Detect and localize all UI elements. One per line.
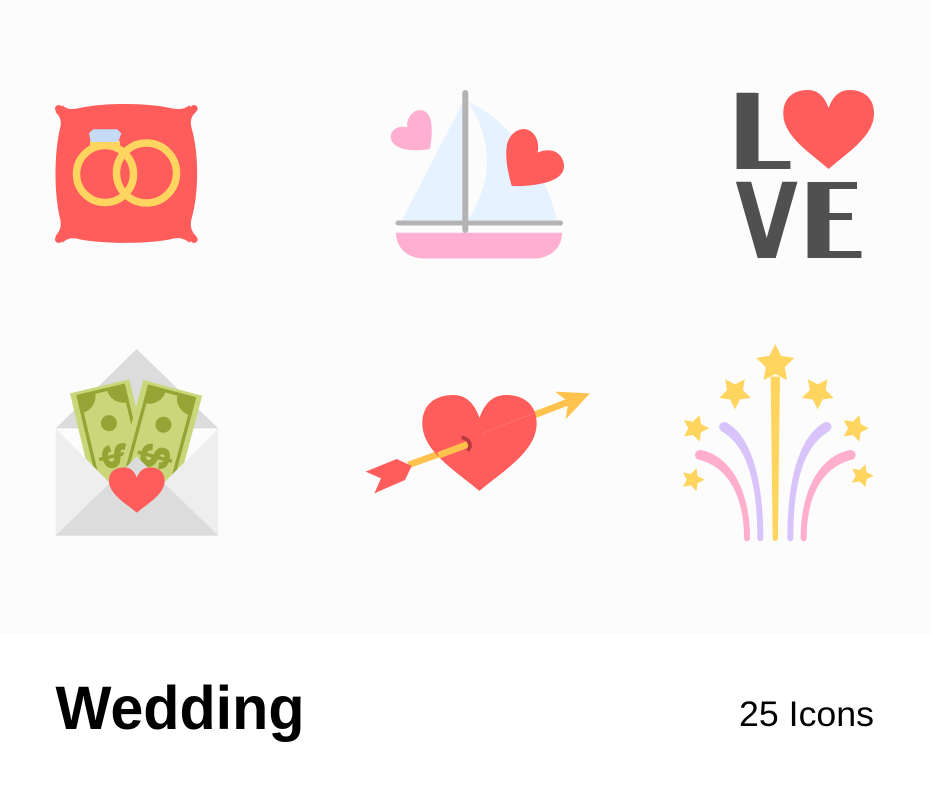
icon: LOVE lettering with heart — [727, 72, 874, 283]
icon: LOVE lettering with heart: E — [798, 161, 869, 283]
icon: sailboat with hearts — [391, 90, 564, 258]
icon: ring pillow — [55, 104, 198, 243]
icon: heart pierced by arrow — [366, 392, 590, 493]
icon count: 25 Icons — [739, 695, 874, 734]
icon: envelope with money: $ — [130, 439, 181, 474]
icon: LOVE lettering with heart: V — [736, 162, 798, 283]
icon: fireworks — [683, 344, 874, 541]
icon: envelope with money — [56, 349, 218, 536]
title: Wedding — [56, 674, 304, 742]
icon: envelope with money: $ — [91, 438, 143, 472]
icon: LOVE lettering with heart: L — [727, 72, 793, 194]
